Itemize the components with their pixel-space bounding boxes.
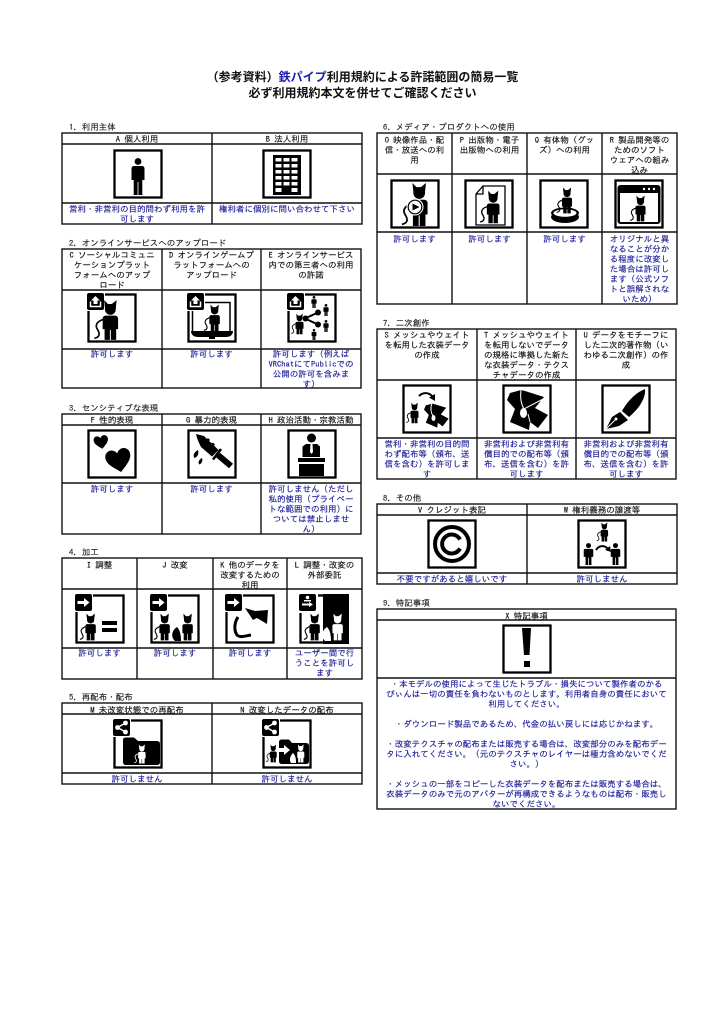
header V: V クレジット表記 [418, 507, 486, 515]
header S: を転用した衣装データ [384, 342, 470, 350]
header X: X 特記事項 [505, 613, 548, 621]
value E: す） [302, 381, 320, 389]
value E [268, 350, 354, 389]
header T: を転用しないでデータ [484, 342, 569, 350]
header B: B 法人利用 [266, 136, 308, 144]
header T: な衣装データ・テクス [484, 362, 569, 370]
icon: exclamation [502, 624, 552, 674]
icon: cat and garment [402, 384, 452, 434]
value T [477, 440, 576, 480]
header S: の作成 [414, 352, 440, 360]
header U: した二次的著作物（い [584, 342, 668, 350]
icon: upload to game platform [187, 293, 237, 343]
header C: ケーションプラット [74, 262, 150, 270]
header R: ためのソフト [614, 147, 665, 155]
header K: 利用 [242, 582, 258, 590]
heading: 6. メディア・プロダクトへの使用 [383, 124, 515, 132]
value L: ユーザー間で行 [295, 650, 354, 658]
heading: 1. 利用主体 [69, 124, 116, 132]
value T: 布、送信を含む）を許 [484, 461, 569, 469]
heading: 4. 加工 [69, 548, 99, 556]
section 6: メディア・プロダクトへの使用 [376, 122, 678, 305]
icon: video [390, 179, 440, 229]
value F: 許可します [91, 486, 133, 494]
icon: garment [502, 384, 552, 434]
header U: わゆる二次創作）の作 [584, 352, 668, 360]
header D: アップロード [186, 272, 237, 280]
value L: うことを許可し [295, 660, 354, 668]
value T: 償目的での配布等（頒 [484, 451, 569, 459]
header T: チャデータの作成 [492, 372, 560, 380]
header U: 成 [622, 362, 630, 370]
icon: knife [187, 429, 237, 479]
value B: 権利者に個別に問い合わせて下さい [219, 206, 355, 214]
notes text: 利用してください。 [488, 701, 565, 709]
value U: 非営利および非営利有 [584, 441, 668, 449]
icon: sharing to third parties [287, 293, 337, 343]
value U: 償目的での配布等（頒 [584, 451, 668, 459]
header E [268, 251, 354, 280]
header K: 改変するための [220, 572, 280, 580]
header K [220, 560, 280, 590]
header D [169, 250, 254, 280]
header R: ウェアへの組み [610, 157, 669, 165]
value D: 許可します [190, 351, 233, 359]
value N: 許可しません [262, 776, 312, 784]
value L [295, 649, 354, 678]
header D: ラットフォームへの [173, 262, 250, 270]
value P: 許可します [468, 236, 511, 244]
header A: A 個人利用 [116, 136, 158, 144]
value V: 不要ですがあると嬉しいです [397, 576, 507, 584]
section 9: 特記事項 [377, 597, 677, 810]
notes text [377, 680, 676, 810]
value T: 可します [510, 471, 544, 479]
header F: F 性的表現 [91, 417, 133, 425]
section 2: アップロード [61, 238, 362, 389]
icon: person [113, 149, 163, 199]
header M: M 未改変状態での再配布 [90, 707, 184, 715]
notes text: 衣装データのみで元のアバターが再構成できるようなものは配布・販売し [386, 791, 667, 799]
value Q: 許可します [543, 236, 586, 244]
value H: 私的使用（プライベー [268, 496, 354, 504]
header P: 出版物への利用 [460, 147, 519, 155]
header E: の許諾 [298, 272, 324, 280]
notes text: びぃんは一切の責任を負わないものとします。利用者自身の責任において [386, 691, 667, 699]
heading: 3. センシティブな表現 [69, 404, 158, 412]
header Q: ズ）への利用 [539, 147, 590, 155]
icon: rights transfer [577, 519, 627, 569]
section 3: センシティブな表現 [61, 404, 362, 535]
header Q: Q 有体物（グッ [535, 137, 594, 145]
header H: H 政治活動・宗教活動 [268, 417, 354, 425]
section 7: 二次創作 [376, 318, 677, 480]
value C: 許可します [91, 351, 133, 359]
icon: merchandise [539, 179, 589, 229]
header R: R 製品開発等の [610, 137, 669, 145]
value U: 可します [609, 471, 643, 479]
icon: modified distribution [262, 719, 312, 769]
header G: G 暴力的表現 [186, 417, 237, 425]
header S: S メッシュやウェイト [384, 332, 470, 340]
value E: VRChatにてPublicでの [268, 361, 354, 369]
header S [377, 331, 477, 361]
value A: 可します [120, 216, 154, 224]
header C: C ソーシャルコミュニ [70, 252, 154, 260]
header Q [535, 136, 594, 155]
value H: ついては禁止しませ [273, 516, 349, 524]
section 1: 利用主体 [61, 122, 363, 225]
value R [610, 234, 669, 304]
header O: O 映像作品・配 [385, 137, 444, 145]
header O [385, 136, 444, 165]
value R: オリジナルと異 [610, 236, 669, 244]
header C: フォームへのアップ [74, 272, 150, 280]
header J: J 改変 [162, 562, 188, 570]
header P [460, 136, 519, 155]
value O: 許可します [393, 236, 436, 244]
header T: T メッシュやウェイト [484, 332, 569, 340]
header R [610, 136, 669, 175]
heading: 9. 特記事項 [383, 600, 430, 608]
value H [268, 484, 354, 534]
value S: す [423, 471, 431, 479]
value R: トと誤解されな [610, 286, 669, 294]
header K: K 他のデータを [220, 562, 280, 570]
header L: 外部委託 [308, 572, 342, 580]
notes text: ・ダウンロード製品であるため、代金の払い戻しには応じかねます。 [395, 721, 658, 729]
heading: 2. オンラインサービスへのアップロード [69, 240, 226, 248]
value U: 布、送信を含む）を許 [584, 461, 668, 469]
header N: N 改変したデータの配布 [240, 707, 334, 715]
header L [295, 560, 354, 580]
icon: publication [464, 179, 514, 229]
value S: わず配布等（頒布、送 [384, 451, 470, 459]
value K: 許可します [229, 650, 271, 658]
header U: U データをモチーフに [584, 332, 668, 340]
icon: folder redistribution [113, 719, 163, 769]
header P: P 出版物・電子 [460, 137, 519, 145]
value R: なることが分か [610, 246, 669, 254]
value E: 公開の許可を含みま [273, 371, 349, 379]
notes text: ・メッシュの一部をコピーした衣装データを配布または販売する場合は、 [386, 781, 667, 789]
section 5: 再配布・配布 [61, 693, 363, 785]
value R: いため） [622, 296, 656, 304]
header I: I 調整 [87, 562, 112, 570]
icon: other data [225, 594, 275, 644]
header W: W 権利義務の譲渡等 [564, 507, 640, 515]
value T: 非営利および非営利有 [484, 441, 569, 449]
title [207, 70, 518, 100]
notes text: タに入れてください。（元のテクスチャのレイヤーは極力含めないでくだ [386, 751, 667, 759]
value L: ます [316, 670, 333, 678]
header D: D オンラインゲームプ [169, 252, 254, 260]
icon: building [262, 149, 312, 199]
header L: L 調整・改変の [295, 562, 354, 570]
icon: modify [150, 594, 200, 644]
header O: 用 [410, 157, 419, 165]
value R: る程度に改変し [610, 256, 669, 264]
value H: 許可しません（ただし [268, 486, 354, 494]
header O: 信・放送への利 [385, 147, 444, 155]
value S: 信を含む）を許可しま [384, 461, 470, 469]
value A: 営利・非営利の目的問わず利用を許 [69, 206, 205, 214]
header E: E オンラインサービス [268, 252, 354, 260]
section 8: その他 [377, 492, 677, 585]
notes text: ないでください。 [492, 801, 560, 809]
notes text: さい。） [510, 761, 544, 769]
value H: ん） [302, 526, 320, 534]
icon: software [614, 179, 664, 229]
icon: copyright [427, 519, 477, 569]
value G: 許可します [190, 486, 233, 494]
header T: の規格に準拠した新た [484, 352, 569, 360]
icon: outsource [299, 594, 349, 644]
value S: 営利・非営利の目的問 [384, 441, 470, 449]
title: 必ず利用規約本文を併せてご確認ください [248, 86, 476, 100]
value U [576, 440, 676, 480]
value R: た場合は許可し [610, 266, 669, 274]
value W: 許可しません [576, 576, 628, 584]
icon: pen nib [601, 384, 651, 434]
header R: 込み [631, 167, 648, 175]
value A [69, 204, 205, 224]
icon: upload cat [87, 293, 137, 343]
header U [576, 331, 676, 371]
value H: トな範囲での利用）に [268, 506, 354, 514]
value R: ます（公式ソフ [610, 276, 669, 284]
notes text: ・本モデルの使用によって生じたトラブル・損失について製作者のかる [390, 681, 662, 689]
value J: 許可します [154, 650, 196, 658]
header C [70, 252, 154, 290]
icon: podium [287, 429, 337, 479]
notes text: ・改変テクスチャの配布または販売する場合は、改変部分のみを配布デー [386, 741, 667, 749]
value I: 許可します [78, 650, 121, 658]
title: （参考資料）鉄パイプ利用規約による許諾範囲の簡易一覧 [207, 70, 518, 84]
header C: ロード [99, 282, 125, 290]
icon: adjust [75, 594, 125, 644]
header T [477, 331, 576, 381]
value M: 許可しません [112, 776, 162, 784]
heading: 8. その他 [383, 494, 421, 502]
icon: hearts [87, 429, 137, 479]
heading: 5. 再配布・配布 [69, 694, 133, 702]
section 4: 加工 [61, 548, 363, 680]
value S [377, 440, 477, 480]
heading: 7. 二次創作 [383, 320, 430, 328]
value E: 許可します（例えば [273, 351, 349, 359]
header E: 内での第三者への利用 [268, 262, 354, 270]
